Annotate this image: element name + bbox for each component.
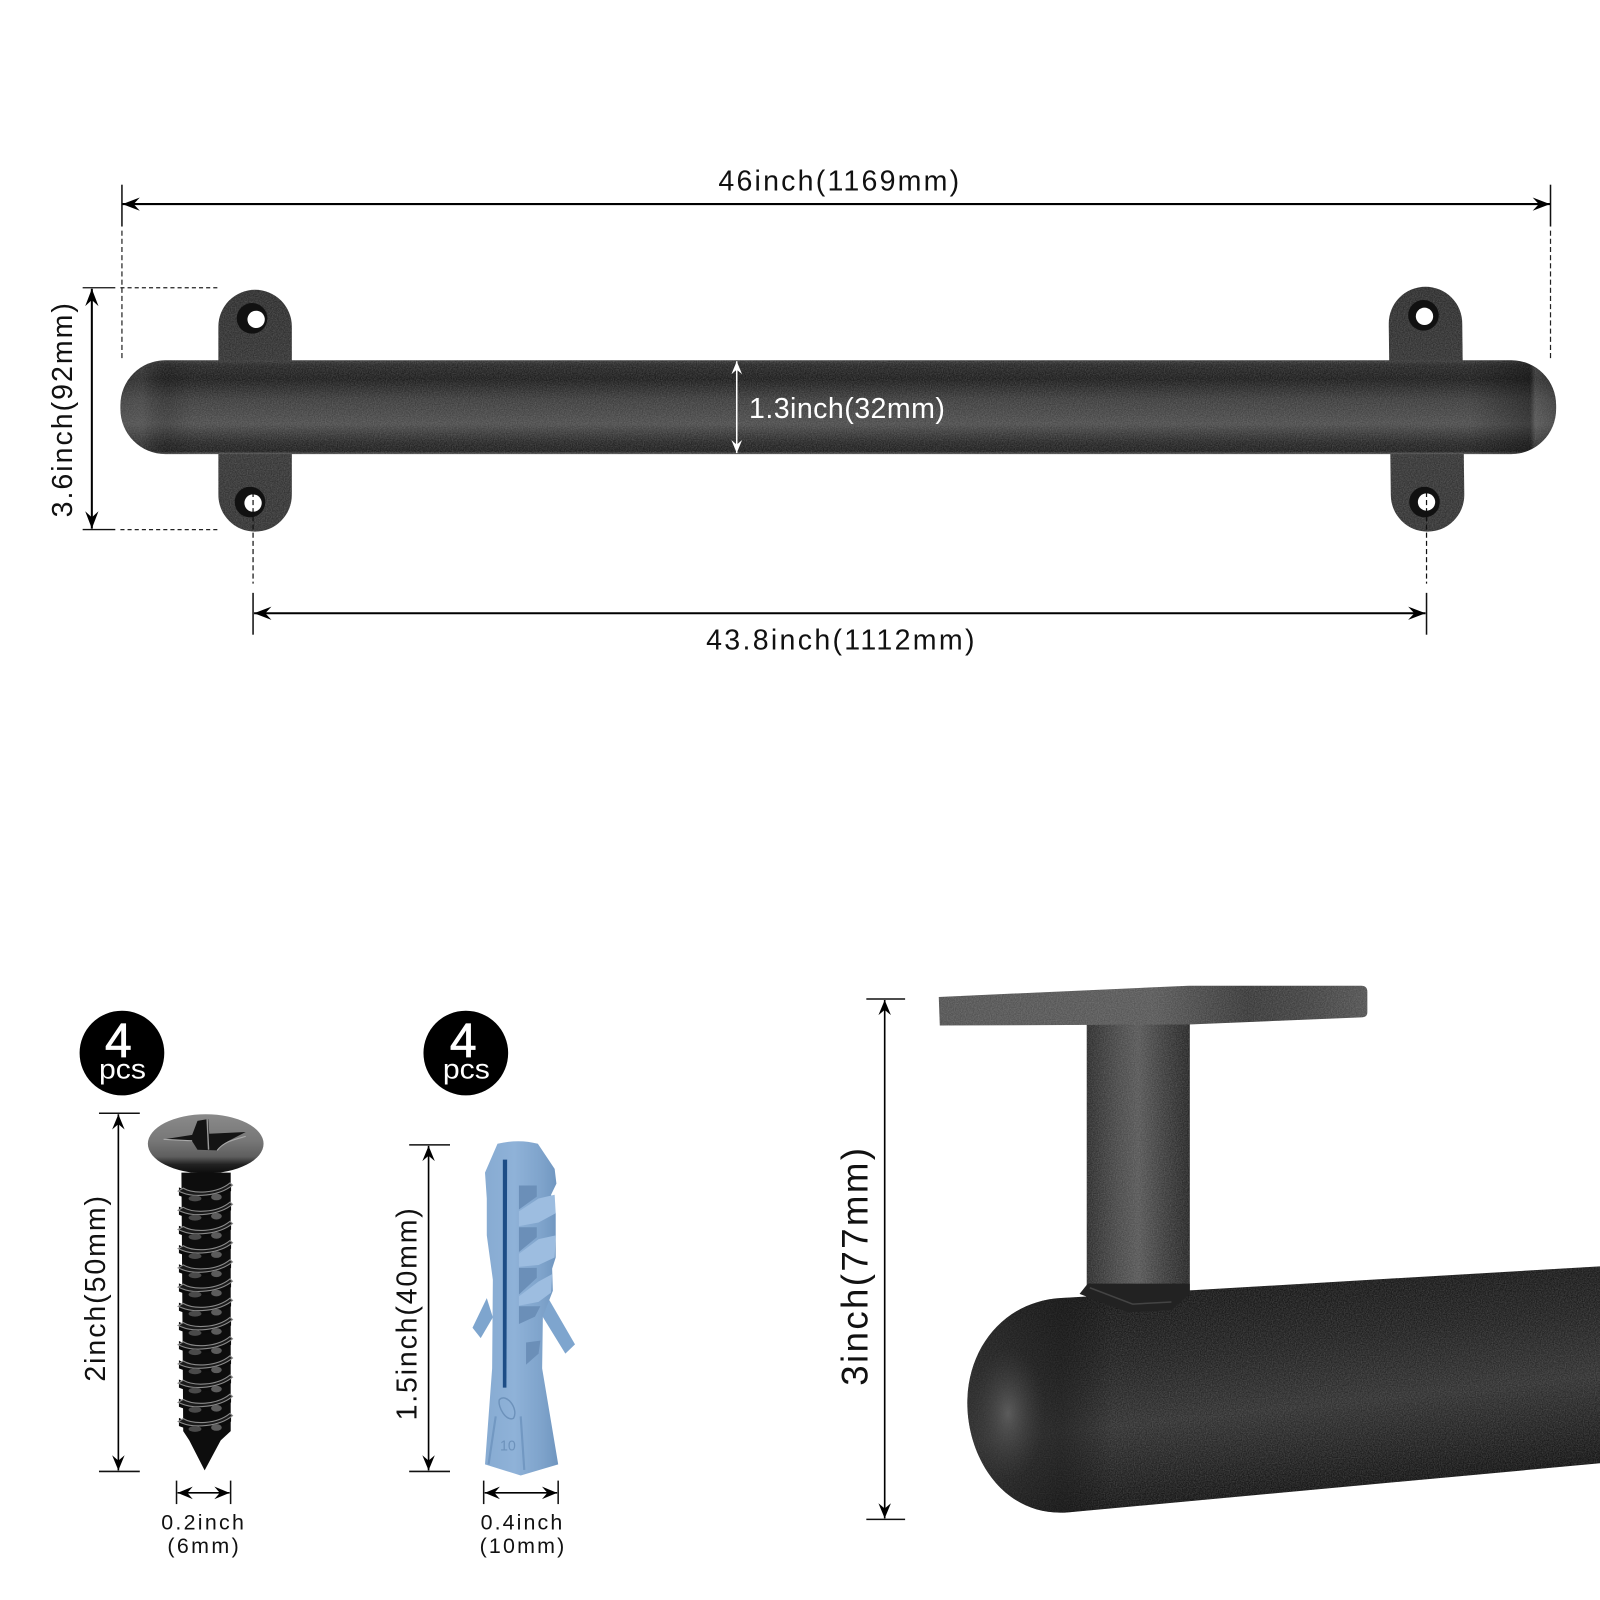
bracket wall plate <box>939 986 1367 1026</box>
badge: 4 pcs screws: 4 <box>105 1015 132 1068</box>
dimension: anchor diameter <box>480 1481 564 1558</box>
badge: 4 pcs anchors: 4 <box>450 1015 477 1068</box>
dimension: screw diameter: (6mm) <box>167 1534 239 1558</box>
panel: screw <box>80 1011 264 1558</box>
dimension: anchor diameter: 0.4inch <box>481 1511 562 1535</box>
dimension: anchor length: 1.5inch(40mm) <box>391 1208 423 1420</box>
dimension: screw diameter: 0.2inch <box>161 1511 244 1535</box>
dimension: screw length: 2inch(50mm) <box>80 1196 112 1382</box>
panel: main handrail dimension drawing <box>47 165 1556 656</box>
dimension: bar diameter: 1.3inch(32mm) <box>749 393 945 425</box>
dimension: hole spacing: 43.8inch(1112mm) <box>706 624 974 656</box>
mounting bracket: left <box>218 290 292 532</box>
icon: blue wall anchor <box>473 1141 575 1475</box>
icon: blue wall anchor: 10 <box>500 1438 516 1454</box>
badge: 4 pcs anchors: pcs <box>443 1054 490 1085</box>
panel: wall anchor <box>391 1011 575 1558</box>
badge: 4 pcs screws <box>80 1011 164 1095</box>
bracket stem <box>1087 1023 1190 1309</box>
icon: black screw <box>148 1114 264 1470</box>
dimension: screw diameter <box>161 1481 244 1558</box>
mounting bracket: right <box>1389 287 1464 532</box>
dimension: bracket projection: 3inch(77mm) <box>834 1148 875 1386</box>
dimension: anchor diameter: (10mm) <box>480 1534 564 1558</box>
badge: 4 pcs anchors <box>423 1011 508 1095</box>
handrail bar <box>120 360 1556 454</box>
panel: bracket close-up <box>834 986 1600 1519</box>
dimension: overall length: 46inch(1169mm) <box>718 165 959 197</box>
dimension: bracket height: 3.6inch(92mm) <box>47 303 79 517</box>
handrail tube end <box>967 1266 1600 1513</box>
badge: 4 pcs screws: pcs <box>99 1054 146 1085</box>
